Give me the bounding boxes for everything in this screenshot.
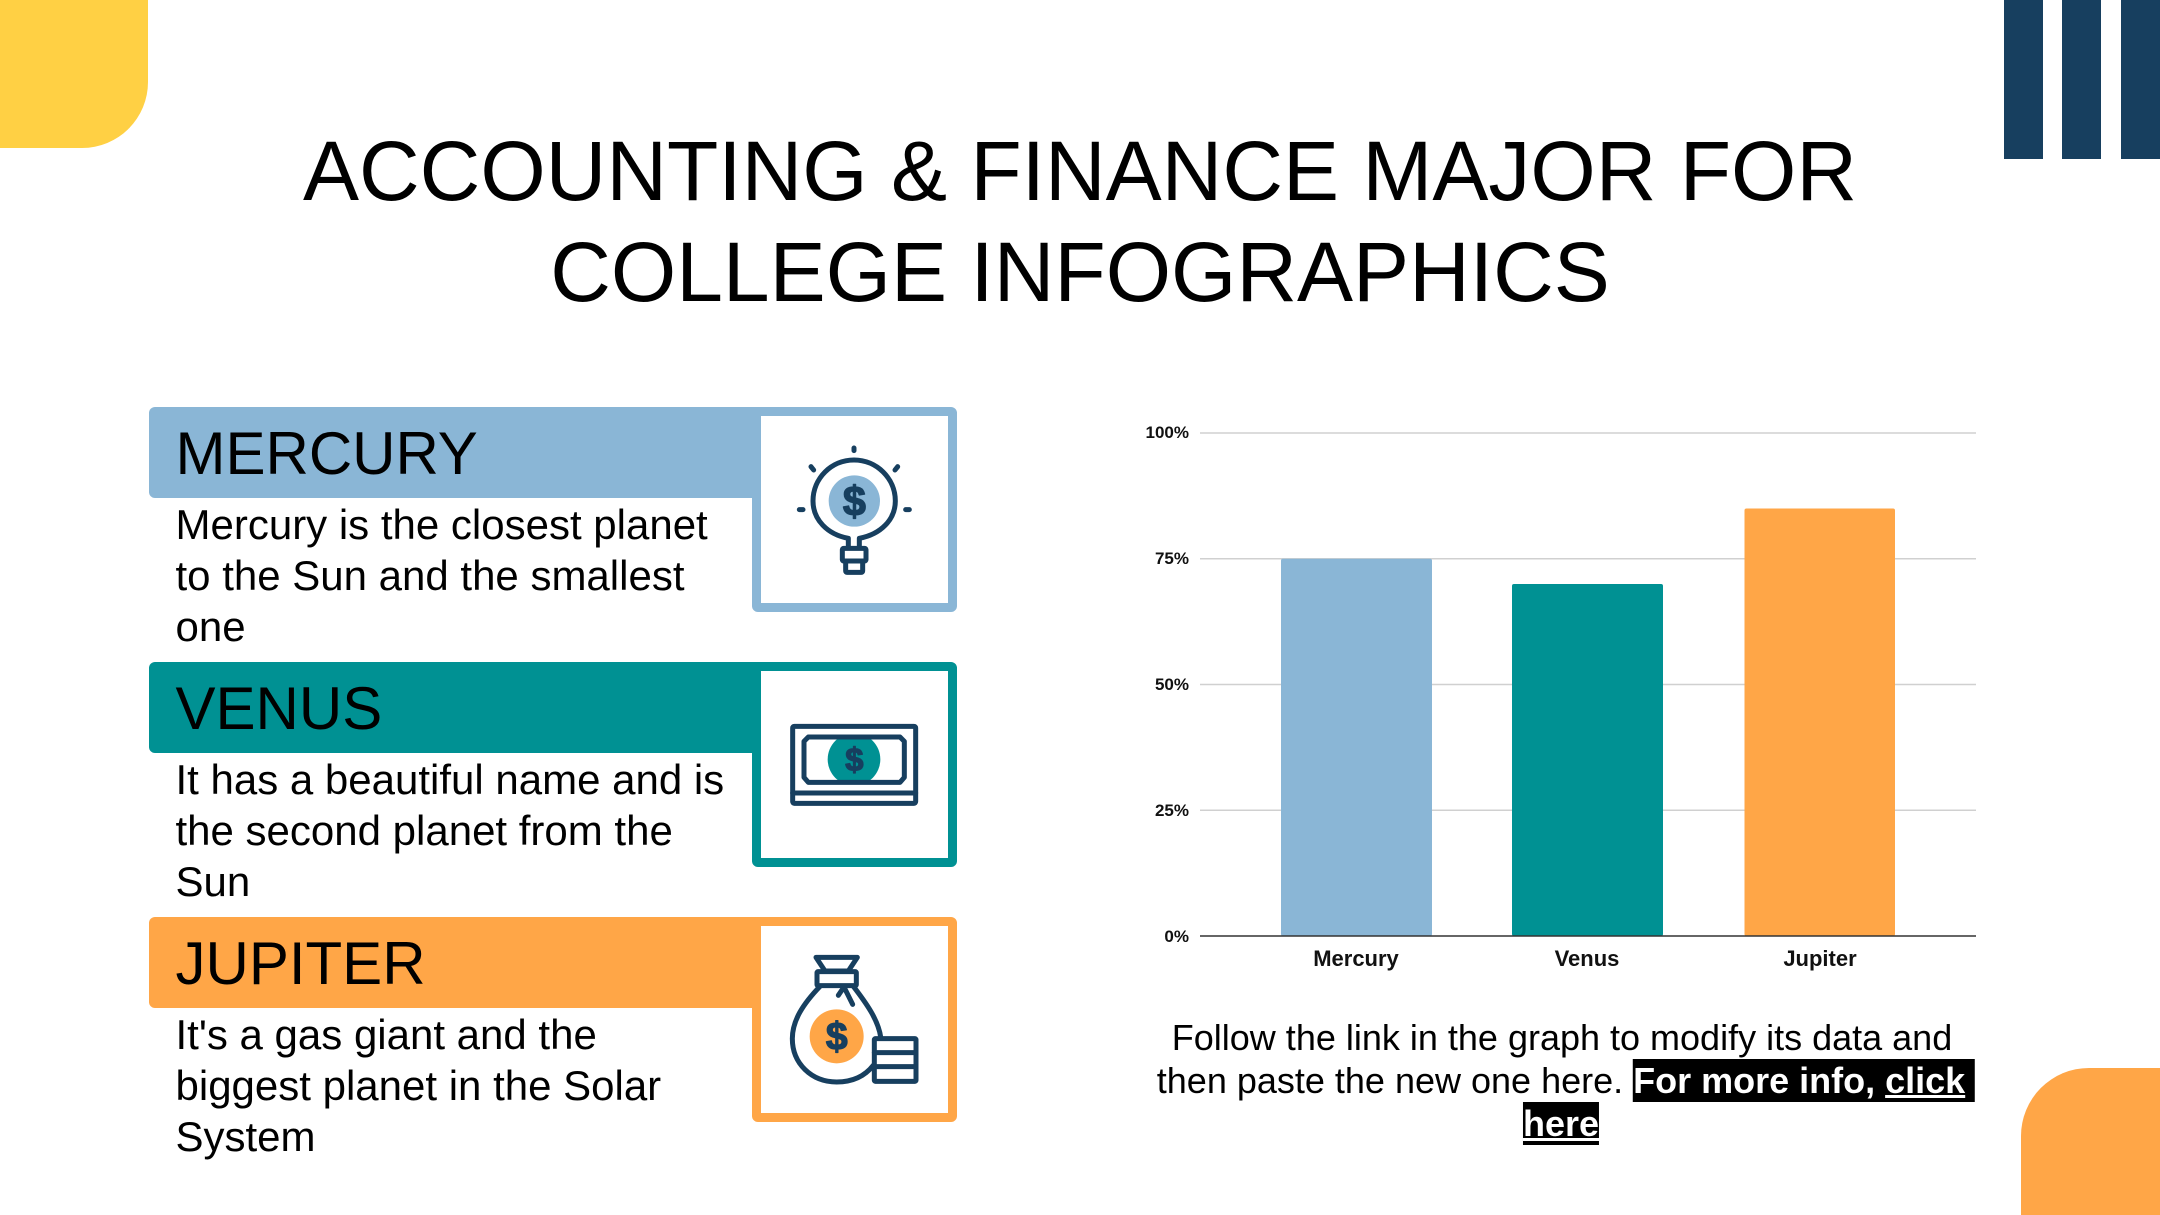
y axis labels [1146, 423, 1189, 946]
icon box: money bag and coins: $ [826, 1016, 848, 1059]
text: mercury description: to the Sun and the smallest [176, 552, 684, 599]
text: mercury description [176, 501, 708, 650]
text: venus description: the second planet from the [176, 807, 673, 854]
header bar: venus [149, 662, 849, 753]
icon box: money bag and coins [752, 917, 957, 1122]
y axis labels: 100% [1146, 423, 1189, 442]
header bar: mercury [149, 407, 849, 498]
caption text [1157, 1017, 1975, 1145]
icon box: banknote: $ [845, 741, 863, 778]
panel: venus [149, 662, 957, 905]
text: venus description [176, 756, 724, 905]
x axis labels [1313, 946, 1857, 971]
caption text: Follow the link in the graph to modify its data and [1172, 1017, 1952, 1058]
text: jupiter description: It's a gas giant and the [176, 1011, 597, 1058]
text: venus description: It has a beautiful name and is [176, 756, 724, 803]
title: COLLEGE INFOGRAPHICS [550, 224, 1610, 318]
title [303, 124, 1857, 318]
y axis labels: 50% [1155, 675, 1189, 694]
bars [1281, 508, 1895, 936]
x axis labels: Jupiter [1783, 946, 1857, 971]
title: ACCOUNTING & FINANCE MAJOR FOR [303, 124, 1857, 218]
text: jupiter description: biggest planet in the Solar [176, 1062, 661, 1109]
decorative corner: yellow [0, 0, 148, 148]
y axis labels: 75% [1155, 549, 1189, 568]
icon box: light bulb with dollar: $ [843, 478, 866, 524]
text: venus description: Sun [176, 858, 250, 905]
caption text: then paste the new one here. [1157, 1060, 1623, 1100]
decorative bars: navy [2004, 0, 2160, 159]
decorative corner: orange [2021, 1068, 2160, 1215]
icon box: light bulb with dollar [752, 407, 957, 612]
y axis labels: 0% [1164, 927, 1189, 946]
heading: venus: VENUS [176, 675, 382, 742]
x axis labels: Venus [1555, 946, 1619, 971]
bar chart [1146, 423, 1976, 971]
text: jupiter description: System [176, 1113, 316, 1160]
caption text: For more info, click [1633, 1060, 1965, 1100]
text: mercury description: Mercury is the closest planet [176, 501, 708, 548]
panel: jupiter [149, 917, 957, 1160]
icon box: banknote [752, 662, 957, 867]
text: jupiter description [176, 1011, 661, 1160]
text: mercury description: one [176, 603, 246, 650]
caption text: here [1523, 1103, 1599, 1144]
x axis labels: Mercury [1313, 946, 1400, 971]
heading: mercury: MERCURY [176, 420, 478, 487]
heading: jupiter: JUPITER [176, 930, 426, 997]
header bar: jupiter [149, 917, 849, 1008]
panel: mercury [149, 407, 957, 650]
y axis labels: 25% [1155, 801, 1189, 820]
